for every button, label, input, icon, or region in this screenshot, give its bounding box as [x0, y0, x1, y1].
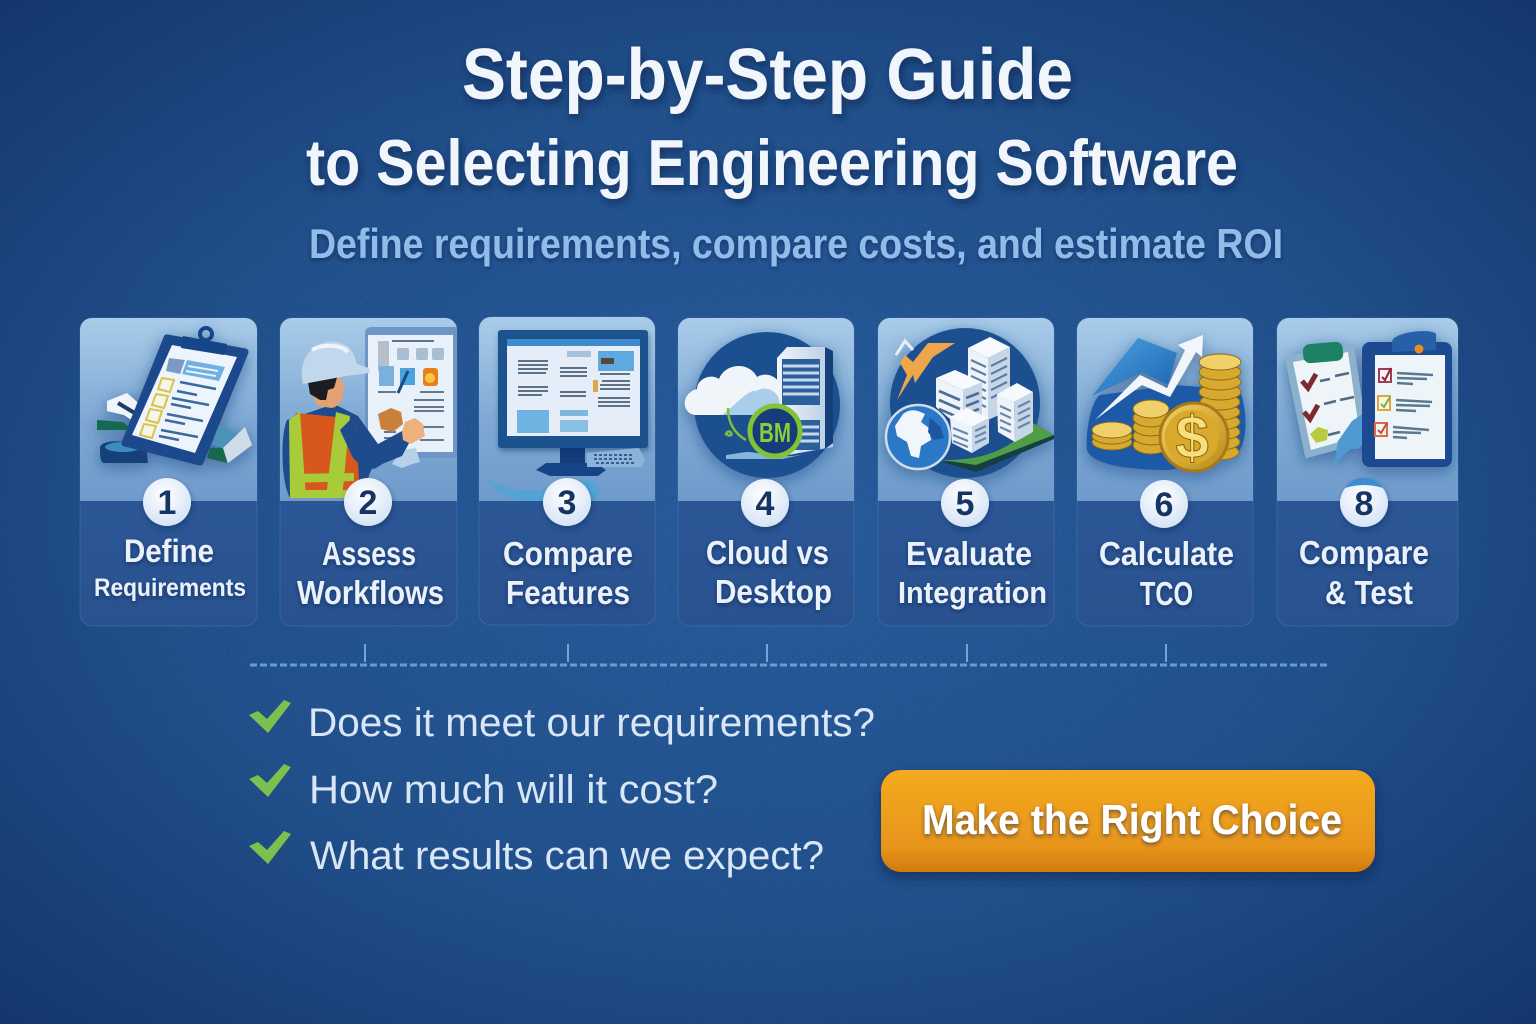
number badge 5 [941, 479, 989, 527]
icon: desktop monitor with software [486, 330, 648, 502]
panel: step 6 calculate tco [1077, 318, 1253, 626]
icon: cloud and server [685, 332, 840, 478]
number badge 1: 1 [158, 484, 176, 522]
label: evaluate integration: Integration [898, 575, 1047, 610]
subtitle: Define requirements, compare costs, and estimate ROI [309, 220, 1283, 267]
label: cloud vs desktop: Cloud vs [706, 534, 829, 571]
label: calculate tco: TCO [1140, 575, 1193, 612]
number badge 6: 6 [1155, 486, 1173, 524]
label: calculate tco [1099, 535, 1234, 612]
icon: clipboard checklist [97, 328, 252, 463]
label: assess workflows: Assess [322, 535, 416, 572]
panel: step 2 assess workflows [280, 318, 460, 626]
label: evaluate integration: Evaluate [906, 535, 1032, 572]
call to action button [881, 770, 1375, 872]
number badge 8 [1340, 478, 1388, 527]
vest and jacket [282, 404, 414, 498]
title: Step-by-Step Guide [462, 35, 1073, 115]
right block [997, 394, 1015, 442]
number badge 3 [543, 478, 591, 526]
label: compare features [503, 535, 633, 611]
number badge 4: 4 [756, 485, 775, 523]
timeline connector [250, 644, 1330, 665]
mid block [936, 378, 963, 430]
number badge 6 [1140, 480, 1188, 528]
tall tower [968, 348, 988, 420]
question 1: Does it meet our requirements? [308, 701, 875, 745]
label: evaluate integration [898, 535, 1047, 610]
icon: growth chart and coins [1087, 335, 1245, 471]
globe [886, 405, 950, 469]
panel: step 8 compare and test [1277, 318, 1458, 626]
panel: step 5 evaluate integration [878, 318, 1054, 626]
call to action button: Make the Right Choice [922, 796, 1342, 843]
label: assess workflows: Workflows [297, 574, 444, 611]
number badge 8: 8 [1355, 485, 1373, 523]
label: cloud vs desktop: Desktop [715, 573, 832, 610]
label: compare and test: & Test [1325, 574, 1413, 611]
number badge 1 [143, 478, 191, 526]
number badge 2 [344, 478, 392, 526]
icon: growth chart and coins: $ [1175, 404, 1209, 471]
icon: two checklists [1287, 331, 1452, 467]
number badge 2: 2 [359, 484, 377, 522]
panel: step 1 define requirements [80, 318, 257, 626]
question 3: What results can we expect? [310, 834, 824, 878]
question 2: How much will it cost? [309, 768, 718, 812]
label: compare and test: Compare [1299, 534, 1429, 571]
label: cloud vs desktop [706, 534, 832, 610]
title: to Selecting Engineering Software [306, 126, 1238, 199]
worker head [312, 377, 344, 408]
number badge 5: 5 [956, 485, 974, 523]
label: define requirements: Requirements [94, 574, 246, 602]
icon: buildings, globe and bird [886, 328, 1054, 478]
icon: cloud and server: BM [759, 417, 791, 448]
label: compare features: Compare [503, 535, 633, 572]
label: assess workflows [297, 535, 444, 611]
title [306, 35, 1238, 199]
number badge 4 [741, 479, 789, 527]
panel: step 4 cloud vs desktop [678, 318, 854, 626]
number badge 3: 3 [558, 484, 576, 522]
label: compare features: Features [506, 574, 630, 611]
label: compare and test [1299, 534, 1429, 611]
small block [950, 417, 972, 453]
panel: step 3 compare features [479, 317, 655, 625]
label: define requirements: Define [124, 533, 214, 569]
label: calculate tco: Calculate [1099, 535, 1234, 572]
checklist questions [249, 700, 875, 878]
icon: worker at plan board [282, 327, 460, 498]
label: define requirements [94, 533, 246, 602]
